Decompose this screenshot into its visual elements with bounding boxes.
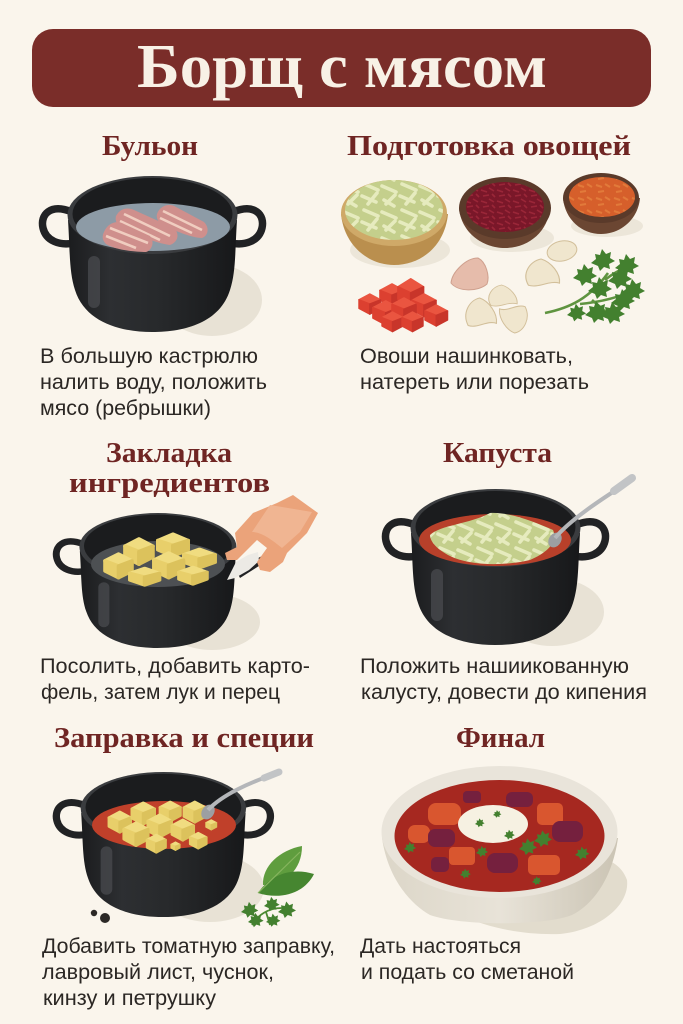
icon: spoon [545, 478, 632, 550]
icon: carrot bowl [563, 173, 643, 237]
icon: hand [225, 495, 318, 572]
text block: adding ingredients [40, 654, 310, 704]
heading: adding ingredients: Закладка [106, 437, 233, 469]
icon: parsley [545, 249, 645, 324]
heading: adding ingredients [69, 437, 270, 499]
herbs [404, 810, 589, 885]
illustration: bowl of borscht [382, 766, 627, 934]
icon: spoon [198, 772, 279, 822]
icon: salt pinch [227, 552, 259, 580]
text block: vegetable preparation: натереть или порезать [360, 370, 589, 394]
heading: vegetable preparation: Подготовка овощей [347, 130, 631, 162]
text block: cabbage [360, 654, 647, 704]
panel: final dish [360, 722, 627, 984]
text block: vegetable preparation: Овоши нашинковать, [360, 344, 573, 368]
icon: diced tomatoes [359, 279, 448, 332]
text block: dressing and spices: лавровый лист, чуснок, [42, 960, 274, 984]
heading: cabbage: Капуста [443, 437, 552, 469]
title: Борщ с мясом [137, 33, 547, 101]
text block: final dish: Дать настояться [360, 934, 521, 958]
illustration: pot with cabbage and spoon [385, 478, 632, 646]
text block: adding ingredients: фель, затем лук и перец [41, 680, 280, 704]
text block: broth: мясо (ребрышки) [40, 396, 211, 420]
text block: dressing and spices [42, 934, 335, 1010]
panel: adding ingredients [40, 437, 318, 704]
heading: broth: Бульон [102, 130, 198, 162]
illustration: pot with tomato dressing [56, 772, 314, 927]
icon: cilantro [241, 897, 296, 927]
carrot chunks [408, 803, 563, 875]
icon: cabbage bowl [341, 180, 450, 268]
heading: final dish: Финал [456, 722, 545, 754]
text block: cabbage: Положить нашиикованную [360, 654, 629, 678]
title banner [32, 29, 651, 107]
panel: cabbage [360, 437, 647, 704]
beet chunks [428, 791, 583, 873]
icon: peppercorns [91, 910, 110, 923]
icon: garlic cloves [451, 238, 579, 333]
sour cream [458, 805, 528, 843]
text block: dressing and spices: Добавить томатную заправку, [42, 934, 335, 958]
text block: cabbage: калусту, довести до кипения [361, 680, 647, 704]
icon: beet bowl [459, 177, 554, 252]
heading: adding ingredients: ингредиентов [69, 467, 270, 499]
text block: final dish [360, 934, 574, 984]
text block: broth: налить воду, положить [40, 370, 267, 394]
text block: vegetable preparation [360, 344, 589, 394]
text block: broth: В большую кастрюлю [40, 344, 258, 368]
text block: final dish: и подать со сметаной [361, 960, 574, 984]
text block: adding ingredients: Посолить, добавить карто- [40, 654, 310, 678]
illustration: pot with potatoes and hand [56, 495, 318, 650]
illustration: pot with water and ribs [42, 176, 263, 336]
panel: broth [40, 130, 267, 420]
heading: dressing and spices: Заправка и специи [54, 722, 314, 754]
panel: dressing and spices [42, 722, 335, 1010]
text block: broth [40, 344, 267, 420]
panel: vegetable preparation [341, 130, 645, 394]
icon: bay leaves [258, 846, 314, 896]
text block: dressing and spices: кинзу и петрушку [43, 986, 216, 1010]
